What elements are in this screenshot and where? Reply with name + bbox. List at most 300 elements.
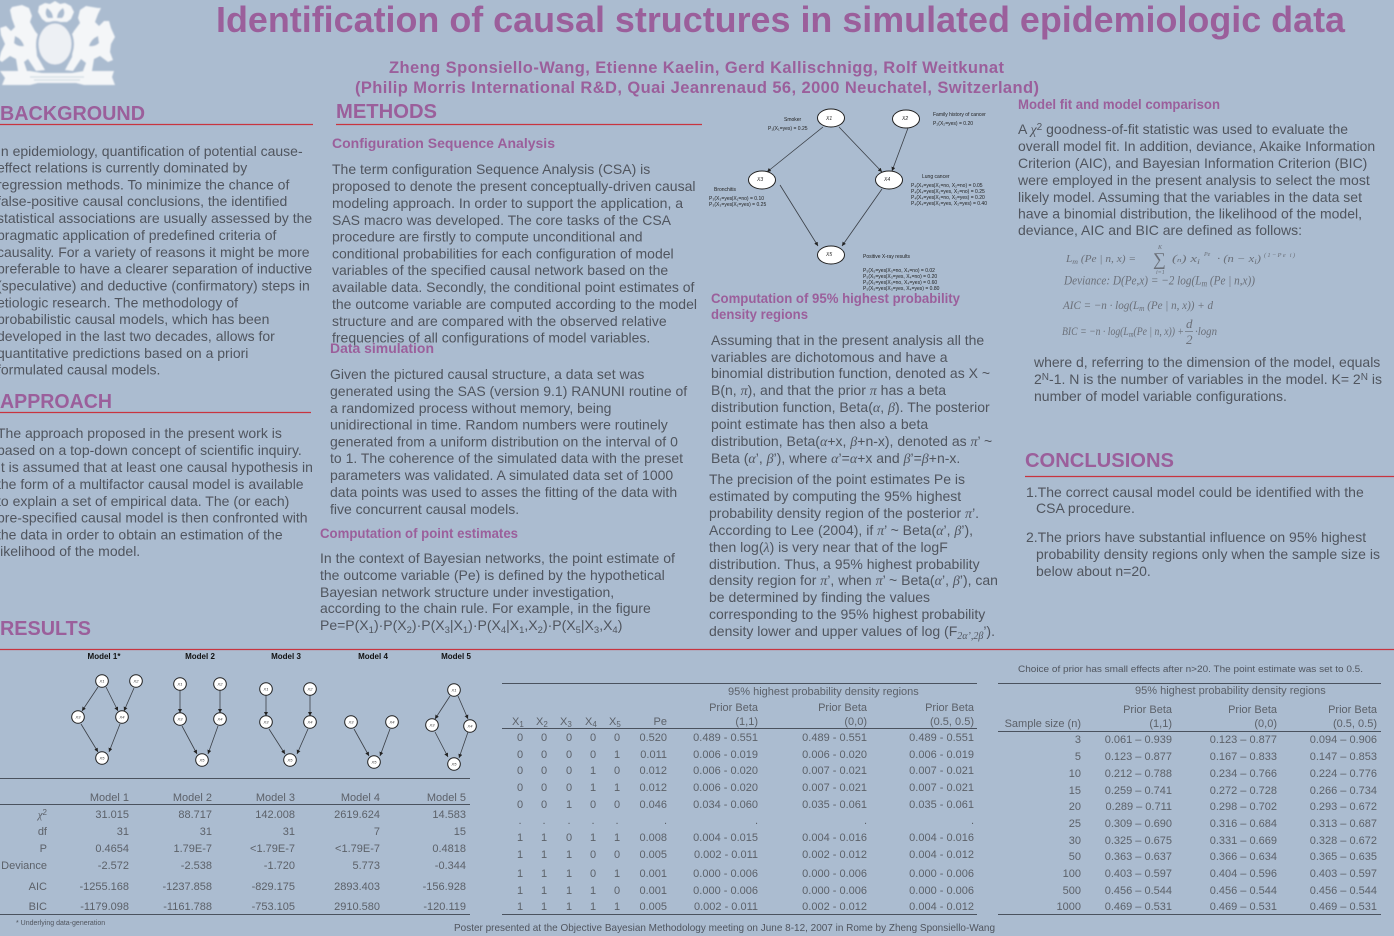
table: probability density regions by configuration: 0.035 - 0.061	[909, 799, 974, 811]
diagram: model 1: X1	[99, 678, 104, 684]
table: probability density regions by configuration: 0	[590, 868, 596, 880]
table: probability density regions by sample size: 0.403 – 0.597	[1310, 868, 1377, 880]
table: probability density regions by sample size: 10	[1069, 768, 1081, 780]
text block: approach: likelihood of the model.	[0, 543, 140, 559]
table: model comparison: 15	[454, 826, 466, 838]
table: probability density regions by configuration: 0	[566, 832, 572, 844]
table: probability density regions by sample size: 15	[1069, 785, 1081, 797]
text block: data simulation: parameters was validated. A simulated data set of 1000	[330, 467, 673, 483]
table: probability density regions by configuration: X	[560, 716, 567, 728]
table: probability density regions by sample size: Sample size (n)	[1005, 718, 1081, 730]
table: model comparison: 14.583	[432, 809, 466, 821]
table: probability density regions by sample size: 20	[1069, 801, 1081, 813]
equations: (Pe | n, x) =	[1078, 254, 1136, 265]
text block: point estimates: )·P(X	[374, 617, 407, 633]
subheading: data simulation: Data simulation	[330, 341, 434, 356]
table: probability density regions by configuration: .	[664, 815, 667, 827]
table: model comparison: -2.538	[181, 860, 212, 872]
table: probability density regions by sample size: 0.366 – 0.634	[1210, 851, 1277, 863]
heading: methods: METHODS	[336, 101, 437, 123]
authors and affiliation: Zheng Sponsiello-Wang, Etienne Kaelin, Gerd Kallischnigg, Rolf Weitkunat	[389, 59, 1004, 77]
table: probability density regions by configuration: (0,0)	[844, 716, 867, 728]
authors and affiliation: (Philip Morris International R&D, Quai Jeanrenaud 56, 2000 Neuchatel, Switzerland)	[355, 79, 1039, 97]
text block: background	[0, 143, 312, 378]
table: probability density regions by configuration: 0	[517, 749, 523, 761]
causal network diagram: X4	[883, 177, 890, 183]
table: probability density regions by configuration: 0.000 - 0.006	[909, 885, 974, 897]
table: model comparison: -1.720	[264, 860, 295, 872]
title: Identification of causal structures in simulated epidemiologic data	[216, 0, 1346, 40]
text block: precision of point estimates: estimated by computing the 95% highest	[709, 488, 961, 504]
table: probability density regions by configuration: 0.520	[639, 732, 667, 744]
table: probability density regions by configuration: 4	[592, 720, 597, 729]
table: probability density regions by sample size: 0.469 – 0.531	[1210, 901, 1277, 913]
text block: background: causality. For a variety of reasons it might be more	[0, 244, 310, 260]
causal network diagram: P₅(X₅=yes|X₃=no, X₄=no) = 0.02	[863, 268, 935, 274]
table: probability density regions by configuration: 0.034 - 0.060	[693, 799, 758, 811]
table: probability density regions by sample size: 0.365 – 0.635	[1310, 851, 1377, 863]
equations: m	[1201, 278, 1208, 288]
diagram: model 2: Model 2	[185, 652, 215, 661]
table: model comparison: Model 4	[341, 792, 380, 804]
diagram: model 1: X2	[133, 678, 139, 684]
text block: approach: It is assumed that at least one causal hypothesis in	[0, 459, 313, 475]
authors and affiliation	[355, 59, 1039, 97]
diagram: model 4: X3	[348, 720, 354, 724]
causal network diagram: P₅(X₅=yes|X₃=yes, X₄=no) = 0.20	[863, 274, 937, 280]
causal network diagram: P₄(X₄=yes|X₁=no, X₂=yes) = 0.20	[911, 195, 985, 201]
table: probability density regions by configuration: 0	[541, 799, 547, 811]
equations	[1062, 245, 1295, 347]
table: probability density regions by configuration: 0.035 - 0.061	[802, 799, 867, 811]
text block: point estimates: 4	[612, 625, 618, 636]
text block: configuration sequence analysis: structure and are compared with the observed relative	[332, 313, 667, 329]
text block: data simulation: to 1. The coherence of the simulated data with the preset	[330, 450, 683, 466]
table: probability density regions by configuration: 1	[517, 885, 523, 897]
equations: · (n − x	[1217, 254, 1247, 265]
heading: conclusions: CONCLUSIONS	[1025, 450, 1174, 472]
table: model comparison: Deviance	[1, 860, 47, 872]
equations: K	[1157, 245, 1163, 251]
table: probability density regions by configuration: 0	[517, 782, 523, 794]
table: probability density regions by configuration: 0.000 - 0.006	[909, 868, 974, 880]
table: probability density regions by configuration: (1,1)	[735, 716, 758, 728]
equations: Deviance: D(Pe,x) = −2 log(L	[1064, 272, 1223, 288]
text block: configuration sequence analysis: SAS macro was developed. The core tasks of the CSA	[332, 212, 672, 228]
table: probability density regions by configuration: .	[518, 815, 522, 827]
causal network diagram: X5	[825, 252, 832, 258]
table: probability density regions by configuration: X	[609, 716, 616, 728]
table: probability density regions by configuration: 0	[614, 732, 620, 744]
causal network diagram: X3	[756, 177, 763, 183]
text block: prior assumptions: distribution, Beta(α+x, β+n-x), denoted as π’ ~	[711, 433, 992, 450]
table: model comparison: -0.344	[435, 860, 466, 872]
panel: approach	[0, 391, 313, 559]
diagram: model 2: X1	[177, 682, 182, 686]
table: probability density regions by configuration: 0	[566, 732, 572, 744]
table: probability density regions by configuration: 0	[614, 799, 620, 811]
table: probability density regions by configuration: 0	[517, 799, 523, 811]
table: probability density regions by configuration: 0	[541, 749, 547, 761]
table: probability density regions by sample size: 0.404 – 0.596	[1210, 868, 1277, 880]
text block: model fit: likely model. Assuming that the variables in the data set	[1018, 189, 1362, 205]
note: choice of prior: Choice of prior has small effects after n>20. The point estimate was set to 0.5.	[1018, 664, 1363, 675]
text block: where d	[1033, 354, 1382, 404]
causal network diagram	[709, 109, 987, 292]
table: model comparison: P	[40, 843, 47, 855]
table: probability density regions by configuration: 1	[541, 849, 547, 861]
table: probability density regions by sample size: 0.469 – 0.531	[1105, 901, 1172, 913]
text block: conclusions: CSA procedure.	[1036, 500, 1135, 516]
table: probability density regions by configuration: 0.006 - 0.019	[909, 749, 974, 761]
table: probability density regions by sample size: 0.293 – 0.672	[1310, 801, 1377, 813]
table: probability density regions by configuration: 1	[541, 868, 547, 880]
text block: data simulation: generated from a uniform distribution on the interval of 0	[330, 434, 678, 450]
equations: )	[1256, 254, 1262, 265]
equations: d	[1186, 316, 1193, 331]
text block: background: effect relations is currently dominated by	[0, 160, 247, 176]
equations: m	[1129, 330, 1134, 339]
text block: precision of point estimates: corresponding to the 95% highest probability	[709, 606, 985, 622]
table: probability density regions by configuration: X	[585, 716, 592, 728]
table: probability density regions by configuration: 1	[590, 885, 596, 897]
table: probability density regions by sample size: 0.234 – 0.766	[1210, 768, 1277, 780]
text block: conclusions	[1026, 484, 1380, 579]
diagram: model 4	[345, 652, 398, 768]
text block: model fit: A χ	[1018, 121, 1037, 138]
table: probability density regions by sample size: 0.061 – 0.939	[1105, 734, 1172, 746]
table: probability density regions by configuration: 95% highest probability density regions	[728, 686, 919, 698]
table: probability density regions by configuration: 0.001	[639, 885, 667, 897]
table: probability density regions by configuration: 0.008	[639, 832, 667, 844]
text block: point estimates: according to the chain rule. For example, in the figure	[320, 600, 651, 616]
diagram: model 5: X5	[451, 762, 457, 766]
table: probability density regions by configuration: 0.006 - 0.020	[693, 782, 758, 794]
text block: configuration sequence analysis	[332, 161, 697, 346]
table: probability density regions by configuration: 1	[541, 901, 547, 913]
table: probability density regions by configuration: 5	[616, 720, 621, 729]
table: probability density regions by sample size: 0.456 – 0.544	[1105, 885, 1172, 897]
table: model comparison: Model 1	[90, 792, 129, 804]
heading: results: RESULTS	[0, 618, 91, 640]
diagram: model 5	[426, 652, 476, 770]
table: probability density regions by sample size: 0.289 – 0.711	[1106, 801, 1172, 813]
table: probability density regions by configuration: 1	[519, 720, 524, 729]
text block: where d: 2	[1034, 371, 1042, 387]
text block: point estimates: 2	[538, 625, 543, 636]
diagram: model 3	[260, 652, 316, 766]
heading: approach: APPROACH	[0, 391, 112, 413]
text block: approach: pre-specified causal model is then confronted with	[0, 510, 308, 526]
equations: ·logn	[1195, 326, 1217, 338]
text block: background: regression methods. To minimize the chance of	[0, 176, 289, 192]
table: probability density regions by sample size: 0.212 – 0.788	[1105, 768, 1172, 780]
table: probability density regions by sample size: 0.403 – 0.597	[1105, 868, 1172, 880]
text block: background: false-positive causal conclusions, the identified	[0, 193, 287, 209]
text block: data simulation: generated using the SAS (version 9.1) RANUNI routine of	[330, 383, 687, 399]
text block: point estimates: 1	[519, 625, 524, 636]
table: probability density regions by sample size: Prior Beta	[1328, 704, 1378, 716]
causal network diagram: P₁(X₁=yes) = 0.25	[768, 126, 808, 132]
table: model comparison: 2910.580	[334, 901, 380, 913]
table: probability density regions by configuration: 0	[566, 765, 572, 777]
diagram: model 4: X5	[371, 760, 377, 764]
text block: conclusions: below about n=20.	[1036, 563, 1151, 579]
table: probability density regions by configuration: 1	[566, 885, 572, 897]
panel: conclusions	[1025, 450, 1394, 579]
table: probability density regions by sample size: (1,1)	[1149, 718, 1172, 730]
text block: where d: where d, referring to the dimension of the model, equals	[1033, 354, 1380, 370]
diagram: model 1: X5	[99, 756, 105, 760]
causal network diagram: P₃(X₃=yes|X₁=yes) = 0.25	[709, 202, 766, 208]
text block: conclusions: 1.The correct causal model could be identified with the	[1026, 484, 1364, 500]
table: probability density regions by configuration: 0.000 - 0.006	[802, 885, 867, 897]
text block: model fit: deviance, AIC and BIC are defined as follows:	[1018, 222, 1302, 238]
table: probability density regions by configuration: Prior Beta	[925, 702, 975, 714]
table: probability density regions by configuration: 0.000 - 0.006	[693, 868, 758, 880]
text block: model fit: Criterion (AIC), and Bayesian Information Criterion (BIC)	[1018, 155, 1367, 171]
equations: AIC = −n · log(L	[1063, 298, 1146, 312]
text block: point estimates: )	[618, 617, 622, 633]
equations: m	[1139, 304, 1145, 313]
text block: precision of point estimates: 2α’,2β	[957, 631, 983, 642]
text block: precision of point estimates: The precision of the point estimates Pe is	[709, 471, 965, 487]
causal network diagram: Positive X-ray results	[863, 254, 910, 260]
table: probability density regions by sample size: 50	[1069, 851, 1081, 863]
table: probability density regions by sample size: 500	[1063, 885, 1081, 897]
text block: precision of point estimates: density region for π’, when π’ ~ Beta(α’, β’), can	[709, 572, 998, 589]
table: probability density regions by configuration: 1	[614, 782, 620, 794]
table: probability density regions by sample size: 0.325 – 0.675	[1105, 835, 1172, 847]
table: model comparison: 5.773	[352, 860, 380, 872]
causal network diagram: P₄(X₄=yes|X₁=no, X₂=no) = 0.05	[911, 183, 983, 189]
table: probability density regions by sample size: 100	[1063, 868, 1081, 880]
subheading: configuration sequence analysis: Configuration Sequence Analysis	[332, 136, 555, 151]
table: probability density regions by configuration: 1	[566, 799, 572, 811]
panel: background	[0, 103, 313, 378]
diagram: model 2: X2	[217, 682, 223, 686]
text block: configuration sequence analysis: proposed to denote the present conceptually-driven causal	[332, 178, 695, 194]
text block: point estimates: 5	[576, 625, 581, 636]
text block: approach: the form of a multifactor causal model is available	[0, 476, 304, 492]
text block: background: preferable to have a clearer separation of inductive	[0, 260, 312, 276]
text block: point estimates: Bayesian network structure under investigation,	[320, 584, 614, 600]
table: probability density regions by configuration: 0.011	[640, 749, 667, 761]
table: probability density regions by configuration: 1	[541, 832, 547, 844]
table: probability density regions by configuration: 0	[614, 885, 620, 897]
text block: prior assumptions: Assuming that in the present analysis all the	[711, 332, 984, 348]
text block: where d: N	[1042, 372, 1049, 383]
table: probability density regions by configuration: .	[971, 815, 974, 827]
table: probability density regions by sample size: 3	[1075, 734, 1081, 746]
table: probability density regions by configuration: 0.007 - 0.021	[909, 782, 974, 794]
panel: highest probability density	[709, 291, 998, 642]
text block: model fit: goodness-of-fit statistic was used to evaluate the	[1042, 121, 1348, 137]
panel: model fit and comparison	[1017, 97, 1382, 404]
causal network diagram: P₂(X₂=yes) = 0.20	[933, 121, 973, 127]
text block: precision of point estimates: ’).	[983, 623, 995, 639]
table: probability density regions by configuration: .	[755, 815, 758, 827]
causal network diagram: X2	[901, 116, 908, 122]
table: model comparison: -1179.098	[80, 901, 129, 913]
causal network diagram: P₅(X₅=yes|X₃=no, X₄=yes) = 0.60	[863, 280, 937, 286]
text block: prior assumptions: point estimate has then also a beta	[711, 416, 928, 432]
text block: model fit: overall model fit. In addition, deviance, Akaike Information	[1018, 138, 1375, 154]
table: probability density regions by sample size: 0.272 – 0.728	[1210, 785, 1277, 797]
text block: configuration sequence analysis: modeling approach. In order to support the application, a	[332, 195, 683, 211]
subheading: model fit and model comparison: Model fit and model comparison	[1018, 97, 1220, 112]
table: probability density regions by configuration: 1	[590, 832, 596, 844]
text block: data simulation: five concurrent causal models.	[330, 501, 519, 517]
table: probability density regions by configuration: 1	[566, 868, 572, 880]
text block: where d: N	[1361, 372, 1368, 383]
table: probability density regions by configuration: 0.007 - 0.021	[802, 782, 867, 794]
causal network diagram: X1	[825, 116, 832, 122]
table: model comparison: 1.79E-7	[173, 843, 212, 855]
table: probability density regions by sample size: 0.469 – 0.531	[1310, 901, 1377, 913]
text block: point estimates: In the context of Bayesian networks, the point estimate of	[320, 550, 675, 566]
text block: background: etiologic research. The methodology of	[0, 294, 238, 310]
diagram: model 4: Model 4	[358, 652, 388, 661]
table: model comparison: 31.015	[95, 809, 129, 821]
table: probability density regions by sample size: 95% highest probability density regions	[1135, 685, 1326, 697]
table: probability density regions by sample size: 0.328 – 0.672	[1310, 835, 1377, 847]
text block: precision of point estimates: density lower and upper values of log (F	[709, 623, 957, 639]
table: model comparison: χ	[37, 809, 44, 821]
table: model comparison	[0, 778, 470, 914]
text block: data simulation: data points was used to asses the fitting of the data with	[330, 484, 677, 500]
table: probability density regions by configuration: 0.000 - 0.006	[693, 885, 758, 897]
diagram: model 3: X5	[287, 758, 293, 762]
text block: prior assumptions: B(n, π), and that the prior π has a beta	[711, 382, 946, 399]
table: probability density regions by configuration: 1	[517, 868, 523, 880]
table: probability density regions by sample size: 0.266 – 0.734	[1310, 785, 1377, 797]
text block: point estimates: |X	[506, 617, 520, 633]
table: probability density regions by sample size: 0.094 – 0.906	[1310, 734, 1377, 746]
table: probability density regions by configuration: 0.489 - 0.551	[909, 732, 974, 744]
table: probability density regions by configuration: 0	[517, 732, 523, 744]
text block: point estimates: 3	[445, 625, 450, 636]
table: probability density regions by configuration: 0.001	[639, 868, 667, 880]
diagram: model 1: Model 1*	[88, 652, 121, 661]
table: probability density regions by sample size: 0.309 – 0.690	[1105, 818, 1172, 830]
table: probability density regions by sample size: 5	[1075, 751, 1081, 763]
table: probability density regions by configuration: 0.002 - 0.011	[694, 901, 758, 913]
table: probability density regions by configuration: 0.004 - 0.016	[802, 832, 867, 844]
table: probability density regions by configuration: 1	[517, 832, 523, 844]
table: probability density regions by configuration: 0.004 - 0.015	[693, 832, 758, 844]
table: model comparison: 88.717	[178, 809, 212, 821]
text block: background: probabilistic causal models, which has been	[0, 311, 269, 327]
table: probability density regions by configuration: 0	[517, 765, 523, 777]
diagram: model 4: X4	[389, 720, 395, 724]
text block: prior assumptions: variables are dichotomous and have a	[711, 349, 948, 365]
table: probability density regions by configuration: 0.002 - 0.012	[802, 901, 867, 913]
table: probability density regions by configuration: .	[542, 815, 546, 827]
equations: i	[1197, 258, 1200, 266]
heading: background: BACKGROUND	[0, 103, 145, 125]
table: probability density regions by configuration: 0.012	[639, 765, 667, 777]
text block: background: (speculative) and deductive (confirmatory) steps in	[0, 278, 310, 294]
text block: point estimates: 1	[463, 625, 468, 636]
table: model comparison: 2619.624	[334, 809, 380, 821]
icon: coat of arms logo	[0, 1, 115, 85]
equations: BIC = −n · log(L	[1062, 324, 1145, 338]
table: model comparison: 31	[200, 826, 212, 838]
table: probability density regions by sample size: 30	[1069, 835, 1081, 847]
table: probability density regions by configuration: 0	[590, 732, 596, 744]
table: probability density regions by configuration: 0	[590, 799, 596, 811]
text block: background: quantitative predictions based on a priori	[0, 345, 248, 361]
table: probability density regions by sample size: 0.224 – 0.776	[1310, 768, 1377, 780]
diagram: model 3: X2	[307, 686, 313, 692]
table: probability density regions by configuration: 0.006 - 0.020	[693, 765, 758, 777]
panel: methods	[320, 101, 702, 636]
table: probability density regions by configuration: 0	[590, 749, 596, 761]
text block: configuration sequence analysis: the outcome variable are computed according to the model	[332, 296, 697, 312]
text block: conclusions: 2.The priors have substantial influence on 95% highest	[1026, 529, 1366, 545]
table: model comparison: <1.79E-7	[250, 843, 295, 855]
text block: configuration sequence analysis: frequencies of all configurations of model variables.	[332, 330, 650, 346]
table: model comparison: 7	[374, 826, 380, 838]
table: probability density regions by configuration: 0	[541, 732, 547, 744]
text block: configuration sequence analysis: The term configuration Sequence Analysis (CSA) is	[332, 161, 650, 177]
table: model comparison: 31	[117, 826, 129, 838]
table: probability density regions by configuration: 1	[590, 782, 596, 794]
table: probability density regions by configuration: 0.005	[639, 849, 667, 861]
equations: (Pe | n, x)) +	[1133, 324, 1184, 338]
table: probability density regions by configuration: .	[864, 815, 867, 827]
equations: ( n) x	[1172, 254, 1192, 265]
table: probability density regions by configuration: .	[567, 815, 571, 827]
table: probability density regions by configuration: 1	[566, 901, 572, 913]
text block: point estimates: 1	[369, 625, 374, 636]
table: model comparison: -156.928	[423, 881, 466, 893]
equations: i=1	[1156, 270, 1165, 276]
table: probability density regions by configuration: 0.000 - 0.006	[802, 868, 867, 880]
equations: (Pe | n,x))	[1207, 272, 1255, 288]
table: model comparison: -1255.168	[79, 881, 129, 893]
equations: Pe	[1203, 252, 1211, 258]
text block: where d: -1. N is the number of variables in the model. K= 2	[1049, 371, 1361, 387]
table: model comparison: -829.175	[252, 881, 295, 893]
table: probability density regions by configuration: 0.046	[639, 799, 667, 811]
causal network diagram: Lung cancer	[922, 174, 950, 180]
text block: precision of point estimates: distribution. Thus, a 95% highest probability	[709, 556, 980, 572]
table: probability density regions by configuration: 0.005	[639, 901, 667, 913]
text block: data simulation	[330, 366, 687, 517]
table: probability density regions by configuration: Pe	[654, 716, 667, 728]
text block: approach: based on a top-down concept of scientific inquiry.	[0, 442, 302, 458]
table: probability density regions by sample size: 0.147 – 0.853	[1310, 751, 1377, 763]
diagram: model 5: X3	[429, 722, 435, 728]
text block: point estimates: 2	[407, 625, 412, 636]
text block: precision of point estimates: be determined by finding the values	[709, 589, 930, 605]
text block: point estimates	[320, 550, 675, 636]
table: probability density regions by configuration: 0.007 - 0.021	[802, 765, 867, 777]
text block: model fit: were employed in the present analysis to select the most	[1017, 172, 1370, 188]
table: probability density regions by configuration: 1	[590, 765, 596, 777]
table: probability density regions by configuration: .	[591, 815, 595, 827]
text block: point estimates: 4	[501, 625, 506, 636]
text block: point estimates: )·P(X	[468, 617, 501, 633]
table: model comparison: Model 5	[427, 792, 466, 804]
table: probability density regions by configuration: 1	[541, 885, 547, 897]
table: probability density regions by configuration: 1	[614, 832, 620, 844]
table: probability density regions by sample size: Prior Beta	[1228, 704, 1278, 716]
text block: where d: number of model variable configurations.	[1034, 388, 1287, 404]
causal network diagram: P₄(X₄=yes|X₁=yes, X₂=no) = 0.25	[911, 189, 985, 195]
